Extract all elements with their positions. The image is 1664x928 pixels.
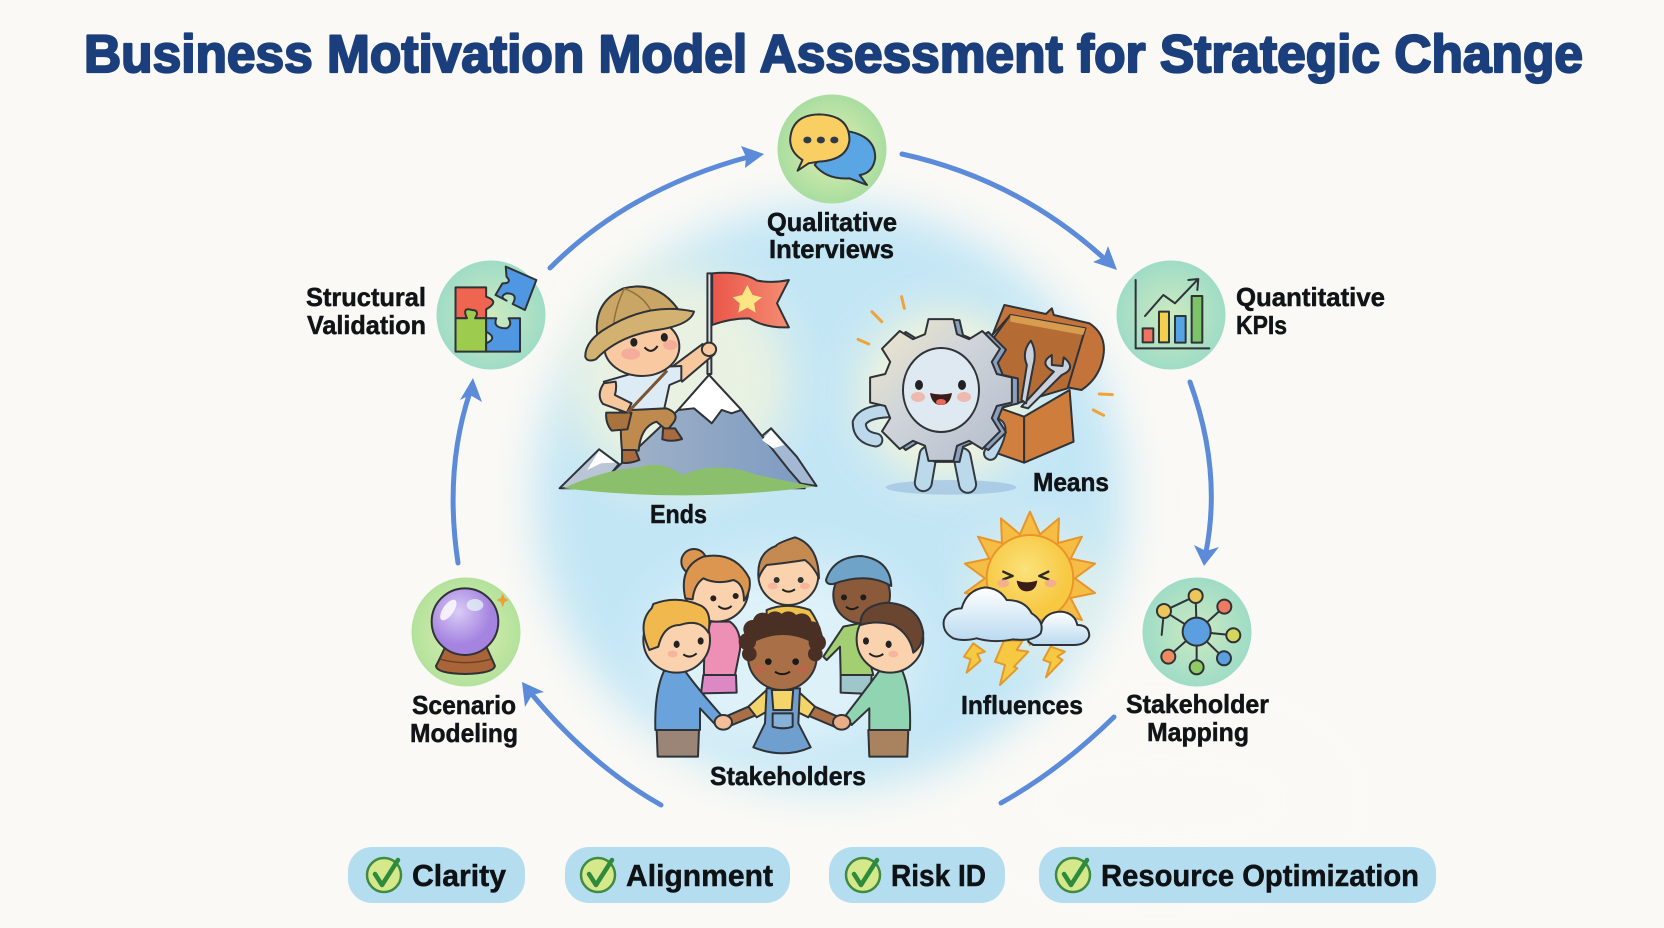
arrow: stakeholder mapping curve to bottom [1001, 717, 1114, 803]
label: Qualitative Interviews [767, 207, 897, 264]
label: Stakeholder Mapping [1126, 689, 1269, 747]
node: structural validation [306, 260, 546, 370]
icon: network diagram [1142, 578, 1252, 686]
back kid: boy in yellow [758, 537, 823, 643]
arrow: structural validation to qualitative interviews [550, 146, 764, 268]
label: Stakeholders: Stakeholders [710, 761, 866, 791]
label: Scenario Modeling [410, 690, 518, 748]
illustration: explorer on mountain with flag [560, 273, 817, 495]
node: scenario modeling [410, 578, 520, 748]
icon: check mark [581, 858, 615, 892]
arrow: qualitative interviews to quantitative KPIs [902, 154, 1117, 270]
front kid: overalls center [722, 611, 842, 753]
node: qualitative interviews [767, 94, 897, 264]
central watercolor blob [535, 205, 1330, 880]
label: Structural Validation: Validation [307, 310, 426, 340]
label: Quantitative KPIs: Quantitative [1236, 282, 1385, 312]
arrow: scenario modeling to structural validation [453, 378, 482, 563]
panel: influences [944, 512, 1095, 720]
icon: check mark [846, 858, 880, 892]
arrow: bottom curve to scenario modeling [522, 682, 661, 805]
back kid: girl in pink [681, 549, 750, 693]
illustration: smiling sun, clouds and lightning [944, 512, 1095, 685]
label: Structural Validation: Structural [306, 282, 426, 312]
pill: Clarity [348, 847, 525, 903]
label: Quantitative KPIs [1236, 282, 1385, 340]
title: Business Motivation Model Assessment for Strategic Change [84, 25, 1583, 84]
panel: stakeholders [643, 537, 923, 791]
label: Qualitative Interviews: Interviews [769, 234, 894, 264]
panel: means [858, 297, 1112, 497]
back kid: child with blue cap [823, 556, 891, 694]
label: Scenario Modeling: Scenario [412, 690, 516, 720]
label: Structural Validation [306, 282, 426, 340]
pill: Alignment: Alignment [626, 858, 773, 893]
front kid: blond in blue [643, 600, 721, 757]
pill: Resource Optimization [1039, 847, 1436, 903]
icon: check mark [1056, 858, 1090, 892]
pill: Risk ID: Risk ID [891, 858, 986, 893]
illustration: gear character with toolbox [858, 297, 1112, 495]
pill: Clarity: Clarity [412, 858, 507, 893]
label: Stakeholder Mapping: Mapping [1147, 717, 1249, 747]
icon: check mark [367, 858, 401, 892]
label: Ends: Ends [650, 499, 707, 529]
pill: Alignment [565, 847, 790, 903]
label: Quantitative KPIs: KPIs [1236, 310, 1287, 340]
label: Scenario Modeling: Modeling [410, 718, 518, 748]
panel: ends [560, 273, 817, 529]
icon: puzzle pieces [436, 260, 546, 370]
icon: bar chart with rising arrow [1116, 260, 1226, 370]
label: Influences: Influences [961, 690, 1083, 720]
illustration: group of children holding hands [643, 537, 923, 757]
node: stakeholder mapping [1126, 578, 1269, 747]
label: Stakeholder Mapping: Stakeholder [1126, 689, 1269, 719]
clasped hands [715, 715, 850, 730]
node: quantitative KPIs [1116, 260, 1385, 370]
pill: Risk ID [829, 847, 1005, 903]
icon: crystal ball [412, 578, 520, 686]
arrow: quantitative KPIs to stakeholder mapping [1190, 382, 1219, 566]
front kid: dark hair in green [846, 603, 923, 757]
label: Means: Means [1033, 467, 1109, 497]
icon: speech bubbles [778, 94, 886, 204]
label: Qualitative Interviews: Qualitative [767, 207, 897, 237]
pill: Resource Optimization: Resource Optimization [1101, 858, 1419, 893]
